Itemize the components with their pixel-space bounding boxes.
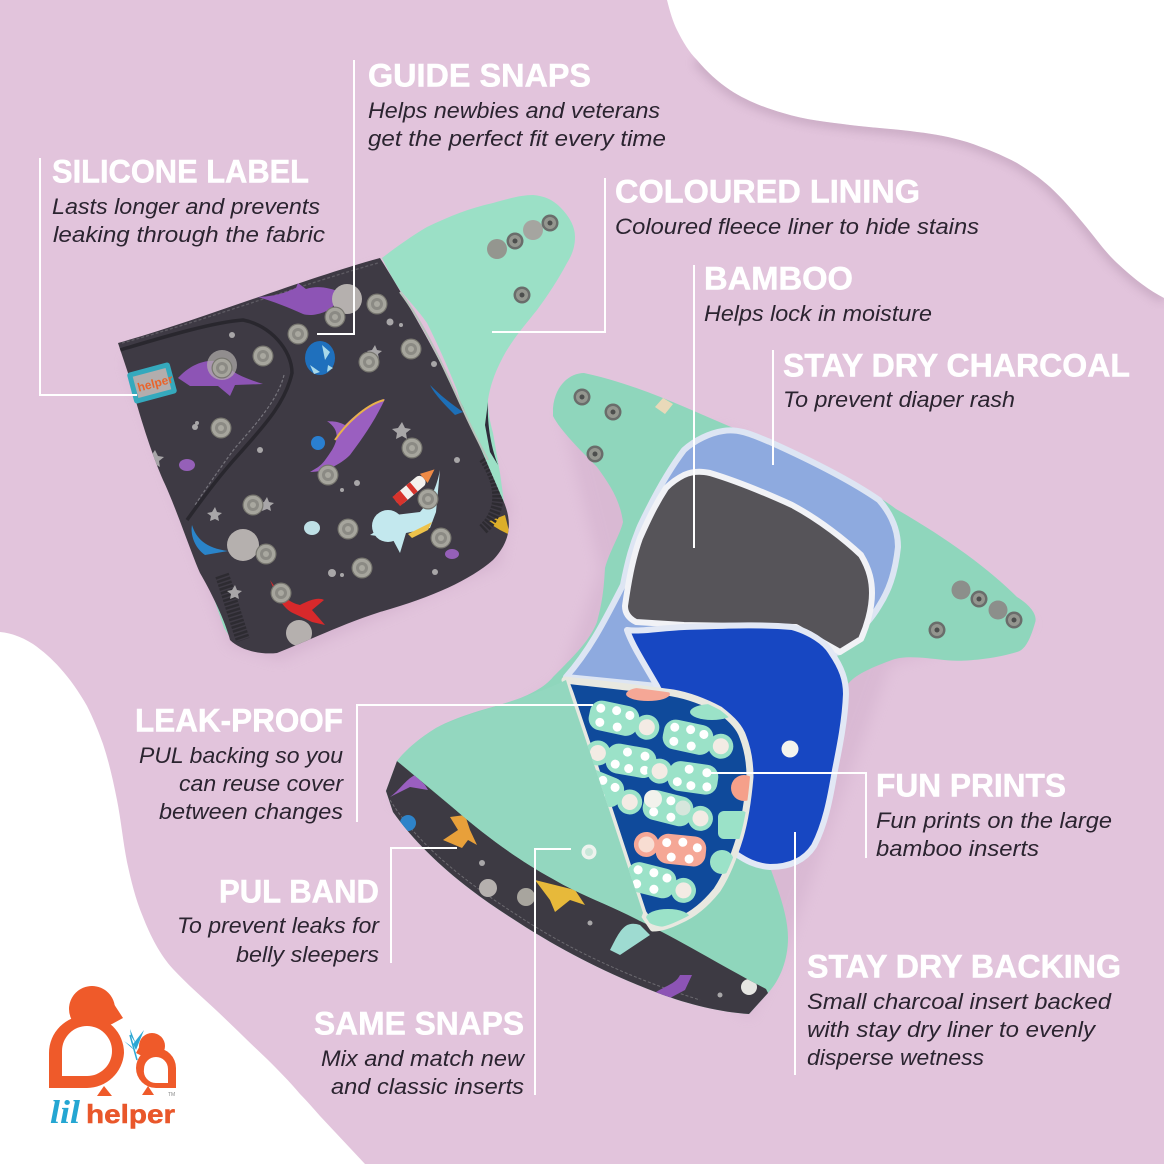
- leak-proof leader line: [357, 705, 593, 822]
- callout: bamboo: [694, 260, 932, 548]
- dark sliver of outer shell: [485, 402, 498, 465]
- partial mint print at right edge: [718, 811, 748, 839]
- stay dry charcoal text: To prevent diaper rash: [783, 387, 1015, 412]
- silicone label leader line: [40, 158, 137, 395]
- planet: [479, 879, 497, 897]
- elastic ruffle left: [222, 575, 243, 640]
- white snap: [741, 979, 757, 995]
- print snaps: [644, 790, 690, 816]
- callout: same snaps: [314, 849, 571, 1099]
- closed diaper mint lining tab: [382, 195, 575, 510]
- big bird: [49, 986, 124, 1096]
- open diaper mint fleece: [386, 373, 1036, 1014]
- closed diaper dark body: [118, 258, 509, 653]
- small fabric tag: [655, 398, 673, 414]
- right tab snaps: [928, 580, 1022, 638]
- purple dino bottom: [370, 605, 430, 625]
- stay dry charcoal heading: STAY DRY CHARCOAL: [783, 348, 1130, 384]
- callout: coloured lining: [492, 174, 979, 332]
- lil wordmark: lil: [50, 1095, 81, 1131]
- dino blue tail right: [430, 385, 463, 415]
- tab snaps: [487, 214, 558, 304]
- silicone label tag: [127, 362, 177, 404]
- charcoal insert: [625, 472, 872, 652]
- small bird: [136, 1033, 176, 1095]
- callout: leak-proof: [135, 702, 593, 824]
- callout: pul band: [177, 848, 457, 967]
- fun prints text: Fun prints on the large: [876, 808, 1112, 833]
- stay dry backing leader line: [794, 832, 796, 1075]
- fun print insert: [565, 680, 757, 928]
- band stitching: [390, 800, 700, 1000]
- leak-proof text: PUL backing so you: [139, 743, 343, 768]
- bamboo leader line: [693, 265, 695, 548]
- callout: silicone label: [40, 154, 325, 395]
- blue spotted egg: [311, 436, 325, 450]
- elastic ruffle right: [482, 458, 498, 530]
- top-left tab snaps: [574, 388, 622, 462]
- callout: fun prints: [703, 768, 1112, 861]
- yellow dino at edge: [489, 515, 508, 534]
- pul band text line 2: belly sleepers: [236, 942, 379, 967]
- bamboo text: Helps lock in moisture: [704, 301, 932, 326]
- coloured lining heading: COLOURED LINING: [615, 174, 920, 210]
- purple dino top: [258, 283, 340, 315]
- same snaps text: Mix and match new: [321, 1046, 526, 1071]
- stay dry backing text line 2: with stay dry liner to evenly: [807, 1017, 1097, 1042]
- stay dry backing text line 3: disperse wetness: [807, 1045, 984, 1070]
- band prints: [390, 775, 757, 1000]
- mint sliver lower left: [187, 523, 232, 640]
- salmon edge piece: [731, 775, 757, 801]
- silicone label text line 2: leaking through the fabric: [53, 222, 325, 247]
- silicone label tag: helper: [136, 372, 175, 395]
- guide snaps text: Helps newbies and veterans: [368, 98, 660, 123]
- helper wordmark: helper: [86, 1099, 175, 1129]
- planet land: [310, 345, 333, 374]
- band fill: [386, 761, 768, 1014]
- open diaper: [386, 373, 1036, 1018]
- small planets: [179, 459, 459, 559]
- yellow rider: [408, 522, 432, 538]
- callout: stay dry charcoal: [773, 348, 1130, 465]
- guide snaps leader line: [317, 60, 354, 334]
- red dino: [270, 580, 325, 625]
- large silver planets: [207, 284, 362, 646]
- same snaps leader line: [535, 849, 571, 1095]
- waistband stitching: [122, 263, 378, 343]
- leaf sprig: [124, 1029, 144, 1060]
- leak-proof text line 3: between changes: [159, 799, 343, 824]
- stars and dots: [145, 318, 460, 599]
- tab seam on body: [400, 292, 488, 460]
- coloured lining text: Coloured fleece liner to hide stains: [615, 214, 979, 239]
- purple dino left: [178, 361, 263, 396]
- silicone label heading: SILICONE LABEL: [52, 154, 309, 190]
- pul band text: To prevent leaks for: [177, 913, 381, 938]
- mint top piece: [690, 704, 734, 720]
- mint bottom piece: [646, 909, 690, 927]
- leak-proof heading: LEAK-PROOF: [135, 702, 343, 738]
- pul band leader line: [391, 848, 457, 963]
- fun prints leader line: [703, 773, 866, 858]
- triceratops: [370, 470, 440, 553]
- big stay-dry insert: [566, 430, 898, 686]
- stay dry backing text: Small charcoal insert backed: [807, 989, 1112, 1014]
- yellow pterodactyl: [443, 815, 477, 848]
- blue planet: [400, 815, 416, 831]
- same snaps text line 2: and classic inserts: [331, 1074, 524, 1099]
- closed diaper shadow: [125, 265, 510, 660]
- same snaps heading: SAME SNAPS: [314, 1006, 524, 1042]
- purple dino center: [310, 399, 385, 472]
- coloured lining leader line: [492, 178, 605, 332]
- bamboo heading: BAMBOO: [704, 260, 853, 296]
- mint flap over print: [397, 680, 643, 921]
- planet blue: [305, 341, 335, 375]
- snap on band: [517, 888, 535, 906]
- guide snaps heading: GUIDE SNAPS: [368, 58, 591, 94]
- yellow rocket dino: [535, 880, 585, 912]
- dark PUL band: [386, 761, 768, 1014]
- waist flap fold: [120, 320, 292, 520]
- stay dry backing heading: STAY DRY BACKING: [807, 948, 1121, 984]
- closed diaper snaps: [210, 294, 452, 604]
- callout: stay dry backing: [795, 832, 1121, 1075]
- stay dry charcoal leader line: [772, 350, 774, 465]
- royal blue insert: [627, 625, 846, 867]
- guide snaps text line 2: get the perfect fit every time: [368, 126, 666, 151]
- logo: lil helper: [49, 986, 176, 1131]
- trademark: TM: [168, 1092, 175, 1098]
- blue band stripe: [192, 525, 228, 555]
- leak-proof text line 2: can reuse cover: [179, 771, 345, 796]
- closed diaper: [118, 195, 575, 660]
- stars: [479, 860, 722, 998]
- mint small end: [710, 850, 734, 874]
- purple dino: [390, 775, 428, 797]
- rocket: [392, 469, 434, 506]
- white snap on blue insert: [782, 740, 798, 758]
- pul band heading: PUL BAND: [219, 874, 379, 910]
- white snap on mint flap: [582, 844, 596, 860]
- open diaper shadow: [390, 410, 1035, 1018]
- teal dino: [610, 924, 650, 955]
- soft edge shadow on blob: [697, 60, 1164, 298]
- purple dino bottom: [656, 975, 692, 998]
- flap stitching: [195, 375, 284, 505]
- closed diaper prints: [120, 263, 510, 646]
- callout: guide snaps: [317, 58, 666, 334]
- silicone label text: Lasts longer and prevents: [52, 194, 320, 219]
- salmon top piece: [626, 687, 670, 701]
- fun prints heading: FUN PRINTS: [876, 768, 1066, 804]
- print base: [565, 680, 750, 928]
- dino tail stripe: [335, 400, 384, 440]
- fun prints text line 2: bamboo inserts: [876, 836, 1039, 861]
- print blobs: [570, 687, 757, 927]
